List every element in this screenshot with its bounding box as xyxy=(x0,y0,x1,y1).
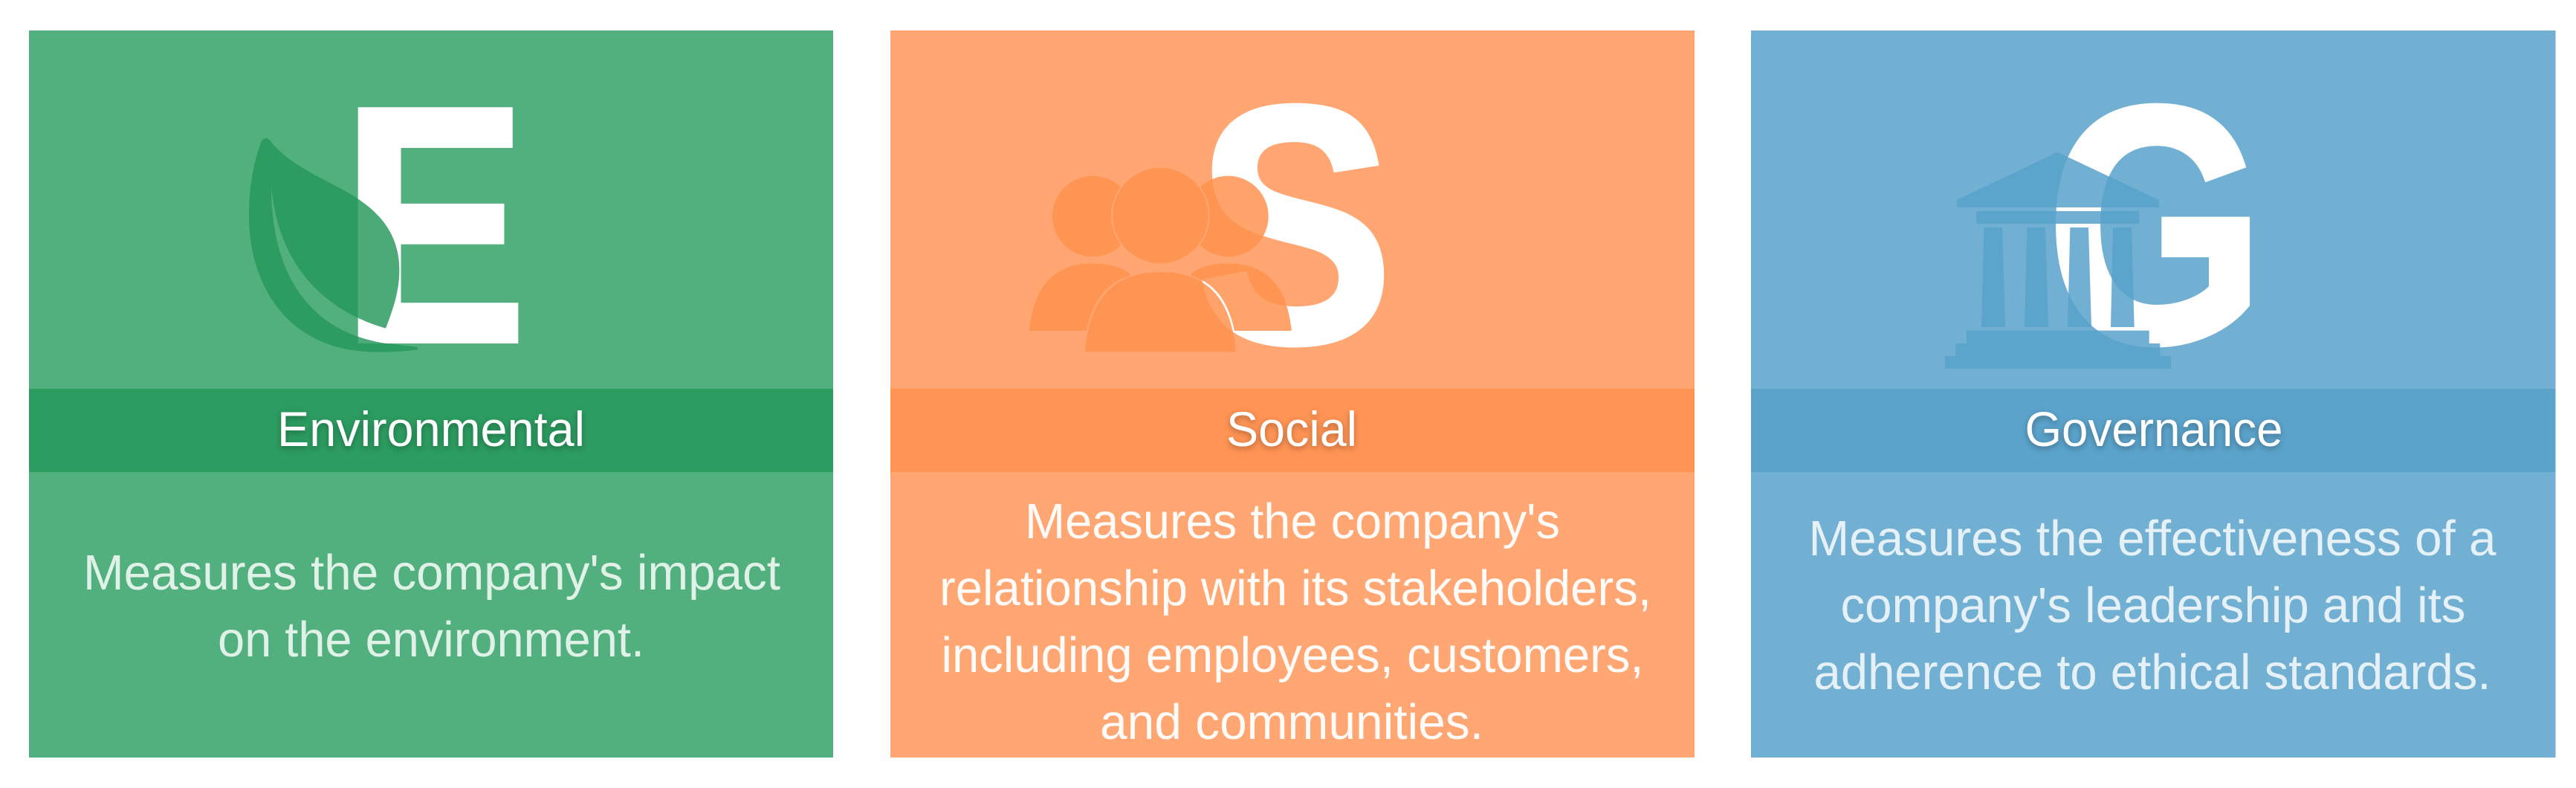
icon: leaf xyxy=(249,138,418,352)
letter E: E xyxy=(340,36,528,414)
text: governance description: adherence to ethical standards. xyxy=(1813,645,2491,700)
text: environmental description: on the environment. xyxy=(218,612,644,668)
panel: social xyxy=(890,30,1695,758)
text: social description: and communities. xyxy=(1100,694,1483,750)
text: governance description: Measures the effectiveness of a xyxy=(1809,511,2496,566)
letter S: S xyxy=(1196,35,1394,414)
band: environmental xyxy=(29,389,833,472)
text: environmental description xyxy=(83,545,780,668)
text: environmental description: Measures the company's impact xyxy=(83,545,780,601)
text: social description: relationship with its stakeholders, xyxy=(939,561,1651,616)
text: social description: including employees, customers, xyxy=(941,627,1644,683)
heading: Social: Social xyxy=(1226,401,1357,456)
icon: classical building xyxy=(1945,152,2171,369)
text: social description xyxy=(939,494,1651,750)
panel: environmental xyxy=(29,30,833,758)
band: governance xyxy=(1751,389,2555,472)
text: governance description xyxy=(1809,511,2496,700)
text: social description: Measures the company's xyxy=(1025,494,1560,549)
panel: governance xyxy=(1751,30,2555,758)
heading: Environmental: Environmental xyxy=(277,401,585,456)
heading: Governance: Governance xyxy=(2025,401,2283,456)
icon: people xyxy=(1029,168,1292,352)
band: social xyxy=(890,389,1695,472)
letter G: G xyxy=(2046,35,2265,414)
text: governance description: company's leadership and its xyxy=(1840,578,2466,633)
